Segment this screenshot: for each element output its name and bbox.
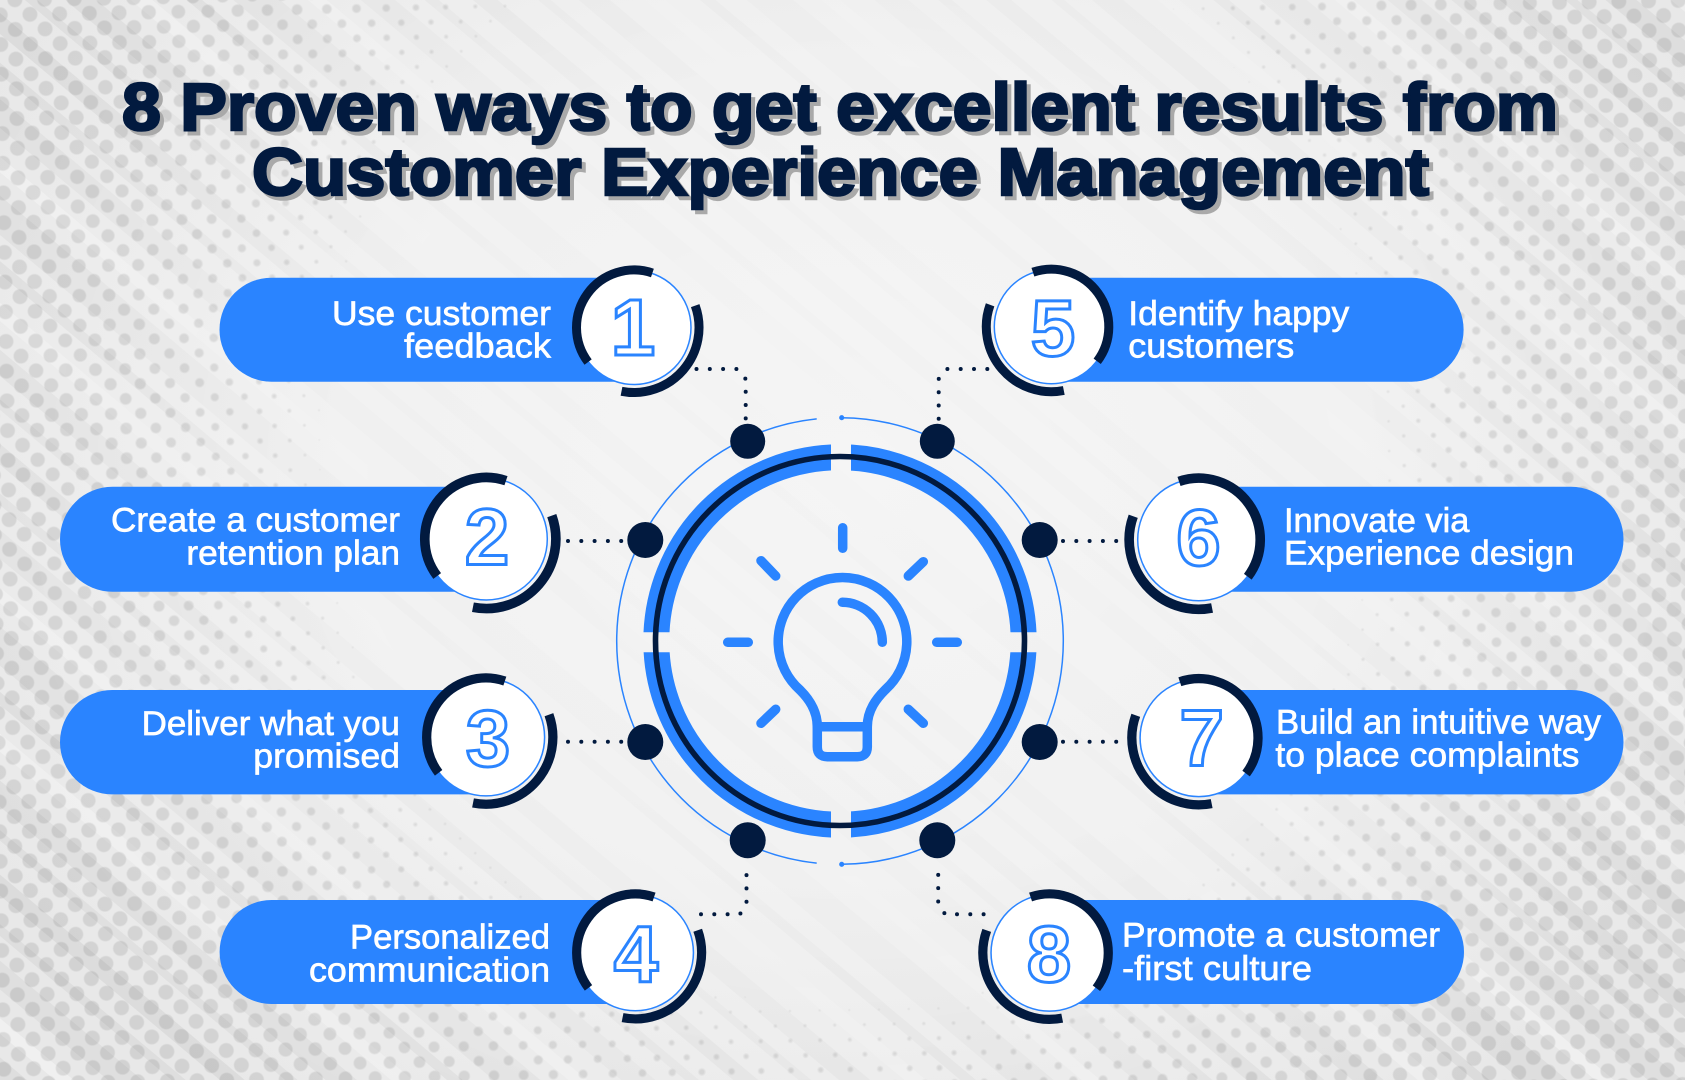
label: to place complaints [1275,737,1579,775]
step 6 [1129,478,1624,609]
step 8 [983,894,1464,1019]
label [111,502,400,572]
step 2 [60,477,556,609]
badge ring [1132,679,1258,805]
badge ring [577,270,699,393]
label: feedback [404,328,552,366]
number: 2 [465,492,509,582]
label [1275,703,1601,775]
pill [1049,900,1464,1004]
step 4 [220,894,702,1019]
badge ring [1129,478,1260,609]
label [1284,502,1574,572]
label: communication [309,952,550,990]
label: Build an intuitive way [1276,703,1601,741]
title: Customer Experience Management [252,135,1429,210]
label: Innovate via [1284,502,1469,540]
label [309,918,550,990]
badge ring [983,894,1108,1019]
number: 4 [614,910,659,998]
number: 7 [1179,694,1224,782]
pill [1198,487,1624,592]
pill [60,690,486,794]
pill [220,278,634,382]
label: promised [253,738,400,776]
number: 1 [611,283,655,372]
title [122,70,1558,210]
central hub [617,416,1063,866]
label: retention plan [186,534,400,572]
label: customers [1128,327,1294,365]
label: Create a customer [111,502,400,540]
number: 8 [1027,910,1071,998]
label: Experience design [1284,534,1574,572]
badge ring [427,678,553,804]
label [142,705,400,776]
label [332,295,552,366]
label: -first culture [1122,950,1312,988]
badge ring [577,894,702,1019]
icon: light bulb [728,528,957,757]
step 1 [220,270,699,393]
label: Deliver what you [142,705,400,743]
number: 6 [1176,493,1221,582]
label: Promote a customer [1122,917,1440,955]
label: Identify happy [1128,295,1349,333]
step 5 [986,269,1464,392]
pill [220,900,635,1004]
thin outer ring [617,416,1063,866]
title: 8 Proven ways to get excellent results from [122,70,1558,145]
badge ring [425,477,556,609]
step 7 [1132,679,1624,805]
pill [1198,690,1624,794]
label [1122,917,1440,988]
node dots [627,424,1058,858]
dotted connectors [568,369,1118,914]
number: 5 [1031,284,1075,372]
blue segmented ring [656,457,1024,825]
badge ring [986,269,1109,392]
label [1128,295,1349,365]
step 3 [60,678,553,804]
label: Use customer [332,295,551,333]
number: 3 [466,694,510,783]
label: Personalized [350,918,550,956]
pill [60,487,486,592]
pill [1051,278,1464,382]
navy ring [656,456,1024,826]
